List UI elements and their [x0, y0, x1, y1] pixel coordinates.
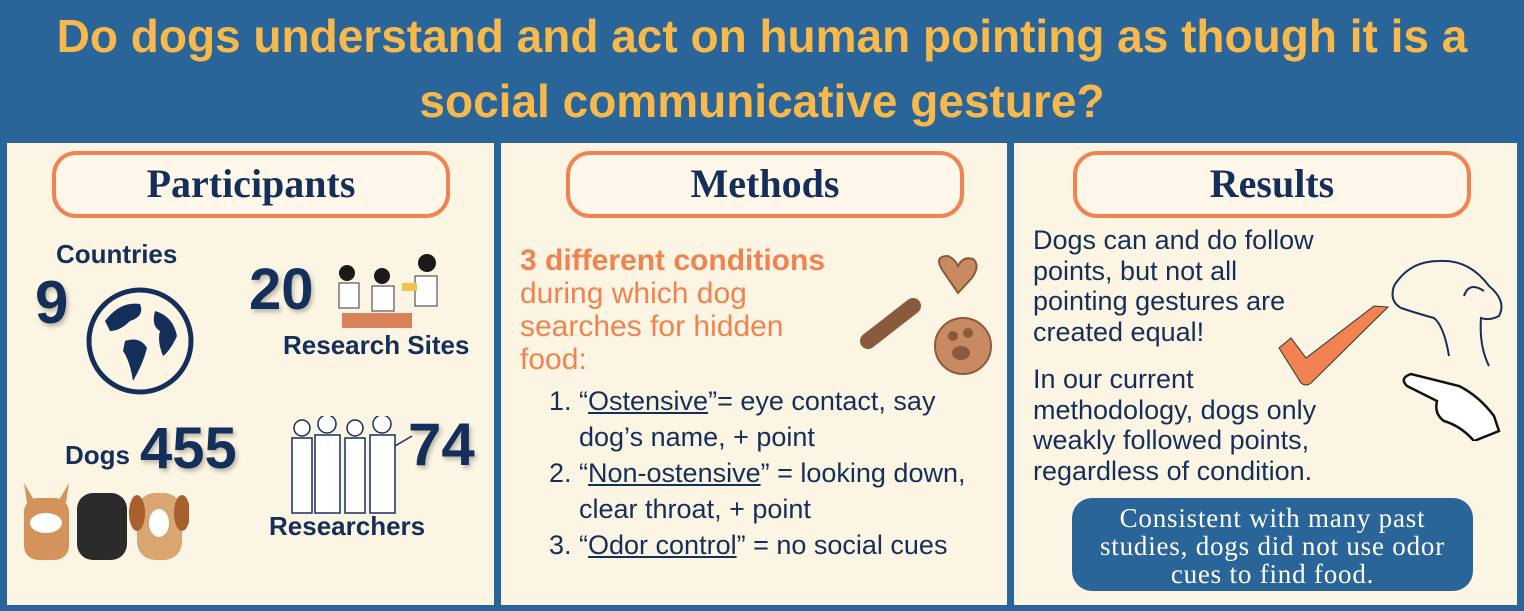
panel: participants	[7, 143, 494, 605]
heading: methods	[566, 151, 964, 218]
text: research sites: Research Sites	[283, 330, 469, 360]
number: 20: 20	[249, 257, 314, 322]
title	[57, 10, 1468, 127]
text: countries: Countries	[56, 239, 177, 269]
text: finding 1	[1033, 225, 1314, 346]
text: dogs: Dogs	[65, 440, 130, 470]
panel: results	[1014, 143, 1517, 605]
text: researchers: Researchers	[269, 511, 425, 541]
title: social communicative gesture?	[419, 75, 1105, 127]
list: conditions: clear throat, + point	[579, 494, 811, 524]
text: finding 1: pointing gestures are	[1033, 286, 1285, 316]
icon: researchers	[291, 416, 412, 514]
text: finding 2: weakly followed points,	[1033, 425, 1309, 455]
text: finding 1: created equal!	[1033, 316, 1204, 346]
heading: methods: Methods	[691, 161, 839, 206]
panel: methods	[501, 143, 1007, 605]
number: 74: 74	[408, 411, 475, 478]
heading: participants	[52, 151, 450, 218]
text: finding 2	[1033, 364, 1316, 486]
heading: results: Results	[1210, 161, 1334, 206]
text: finding 1: Dogs can and do follow	[1033, 225, 1314, 255]
list: conditions: dog’s name, + point	[579, 422, 815, 452]
heading: participants: Participants	[147, 161, 355, 206]
icon: dog and pointing hand	[1392, 260, 1502, 441]
text: conditions intro	[520, 244, 825, 376]
list: conditions: 3. “Odor control” = no social cues	[549, 530, 947, 560]
icon: globe	[86, 288, 194, 394]
icon: treats	[860, 255, 992, 375]
list: conditions: 1. “Ostensive”= eye contact, say	[549, 386, 935, 416]
text: conditions intro: 3 different conditions	[520, 244, 825, 277]
heading: results	[1073, 151, 1471, 218]
callout: odor cues: Consistent with many past	[1120, 503, 1425, 533]
number: 9: 9	[35, 269, 68, 336]
callout: odor cues: studies, dogs did not use odor	[1100, 531, 1445, 561]
text: finding 2: In our current	[1033, 364, 1194, 394]
text: finding 1: points, but not all	[1033, 256, 1237, 286]
text: finding 2: methodology, dogs only	[1033, 394, 1316, 424]
list: conditions	[549, 386, 965, 560]
icon: dogs	[24, 483, 189, 560]
text: finding 2: regardless of condition.	[1033, 456, 1312, 486]
callout: odor cues: cues to find food.	[1171, 559, 1374, 589]
callout: odor cues	[1072, 498, 1473, 591]
icon: scientists	[338, 254, 438, 328]
icon: checkmark	[1278, 306, 1389, 386]
number: 455: 455	[140, 416, 237, 481]
text: conditions intro: during which dog searches for hidden food:	[520, 277, 784, 376]
list: conditions: 2. “Non-ostensive” = looking down,	[549, 458, 965, 488]
title: Do dogs understand and act on human pointing as though it is a	[57, 10, 1467, 62]
